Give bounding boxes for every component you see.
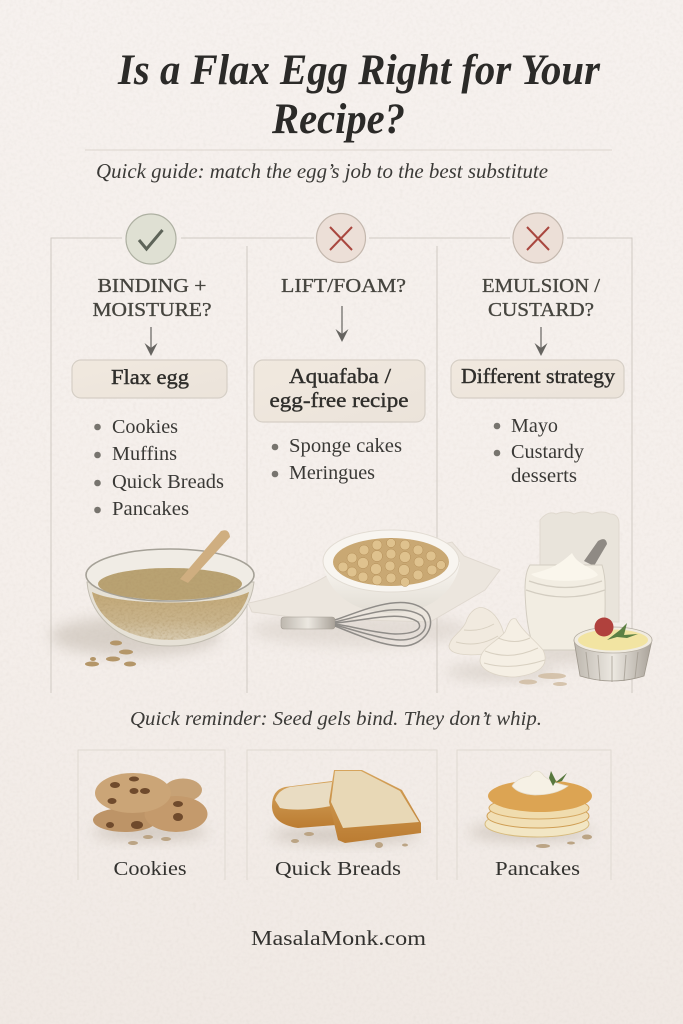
mixture surface	[98, 568, 242, 600]
box: flax egg: Flax egg	[111, 365, 190, 389]
napkin	[248, 542, 500, 622]
glass rim	[86, 549, 254, 601]
list: aquafaba uses	[272, 435, 402, 484]
list: flax egg uses: Pancakes	[112, 498, 189, 520]
spoon	[584, 539, 607, 566]
comparison frame lines	[51, 238, 632, 693]
heading: emulsion and custard: EMULSION /	[482, 275, 600, 297]
panel: cookies	[78, 750, 225, 880]
illustration: quick bread slices	[270, 770, 421, 848]
box: aquafaba	[254, 360, 425, 422]
heading: binding and moisture: MOISTURE?	[92, 299, 212, 321]
box: aquafaba: Aquafaba /	[289, 364, 391, 388]
illustration: chickpea bowl, napkin and whisk	[248, 530, 500, 646]
title	[117, 47, 601, 143]
list: different strategy uses	[494, 415, 584, 487]
list: different strategy uses: Custardy	[511, 441, 584, 463]
arrow: to flax egg	[144, 327, 158, 356]
title: Is a Flax Egg Right for Your	[117, 47, 601, 94]
box: flax egg	[72, 360, 227, 398]
heading: binding and moisture	[92, 275, 212, 321]
list: flax egg uses	[94, 416, 224, 520]
list: flax egg uses: Cookies	[112, 416, 178, 438]
box: different strategy	[451, 360, 624, 398]
heading: binding and moisture: BINDING +	[98, 275, 206, 297]
icon: check mark	[126, 214, 176, 264]
panel: binding and moisture	[72, 214, 227, 520]
panel: quick breads	[247, 750, 437, 880]
illustration: cookies	[92, 773, 208, 845]
illustration: mayo jar, meringues and custard	[445, 512, 652, 686]
subtitle: Quick guide: match the egg’s job to the best substitute	[96, 159, 548, 183]
list: aquafaba uses: Meringues	[289, 462, 375, 484]
label: pancakes: Pancakes	[495, 858, 580, 880]
glass bowl body	[87, 582, 254, 646]
oat mixture	[92, 592, 249, 640]
icon: red cross	[316, 214, 366, 262]
whisk	[281, 617, 335, 629]
bowl	[323, 562, 460, 613]
list: different strategy uses: Mayo	[511, 415, 558, 437]
chickpeas	[338, 538, 446, 586]
heading: emulsion and custard: CUSTARD?	[488, 299, 594, 321]
list: flax egg uses: Quick Breads	[112, 471, 224, 493]
ramekin	[574, 640, 652, 681]
illustration: flax egg bowl	[50, 530, 254, 666]
box: aquafaba: egg-free recipe	[270, 388, 408, 412]
label: quick breads: Quick Breads	[275, 858, 401, 880]
panel: pancakes	[457, 750, 611, 880]
reminder text: Quick reminder: Seed gels bind. They don’t whip.	[130, 709, 542, 730]
panel: emulsion and custard	[451, 213, 624, 487]
list: aquafaba uses: Sponge cakes	[289, 435, 402, 457]
illustration: pancake stack	[468, 771, 592, 848]
label: cookies: Cookies	[114, 858, 187, 880]
jar	[525, 565, 605, 650]
panel: lift and foam	[254, 214, 425, 484]
box: different strategy: Different strategy	[461, 364, 616, 388]
icon: red cross	[513, 213, 563, 263]
heading: lift and foam: LIFT/FOAM?	[281, 275, 406, 297]
list: different strategy uses: desserts	[511, 465, 577, 487]
arrow: to aquafaba	[336, 306, 348, 342]
heading: emulsion and custard	[482, 275, 600, 321]
wooden spoon	[180, 530, 230, 583]
paper card	[540, 512, 619, 622]
footer: website: MasalaMonk.com	[251, 926, 426, 950]
meringues	[445, 665, 555, 679]
arrow: to different strategy	[534, 327, 548, 356]
title: Recipe?	[271, 96, 405, 143]
list: flax egg uses: Muffins	[112, 443, 177, 465]
